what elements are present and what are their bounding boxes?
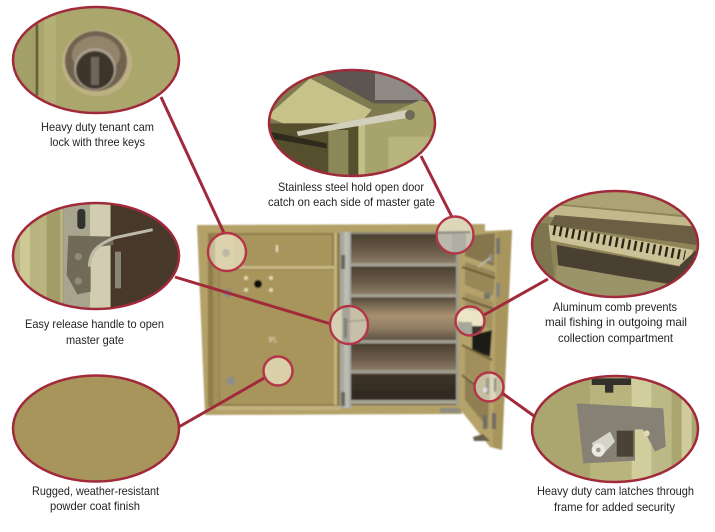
leader: cam lock xyxy=(161,97,224,233)
oval border xyxy=(532,191,698,297)
caption: cam lock xyxy=(41,120,154,149)
magnifier: cam latch on unit xyxy=(474,372,504,402)
lens detail xyxy=(209,239,230,265)
lens detail xyxy=(332,307,366,343)
oval border xyxy=(13,203,179,309)
left door panels: 9'L xyxy=(268,337,278,344)
caption: powder coat: powder coat finish xyxy=(50,499,140,513)
lens detail xyxy=(482,372,496,402)
lens ring xyxy=(330,306,368,344)
oval border xyxy=(532,376,698,482)
magnifier: release handle on unit xyxy=(330,305,370,345)
caption: cam latch xyxy=(537,484,694,514)
photo: latch xyxy=(576,378,692,480)
caption: cam latch: frame for added security xyxy=(554,500,675,514)
lens ring xyxy=(456,306,484,336)
lens ring xyxy=(436,216,474,254)
oval border xyxy=(269,70,435,176)
caption: release handle: Easy release handle to open xyxy=(25,317,164,331)
left door panels xyxy=(208,233,340,410)
photo: comb xyxy=(534,192,696,296)
cabinet frame xyxy=(197,224,485,415)
callout: cam lock xyxy=(10,5,180,115)
leader: door catch xyxy=(421,156,452,217)
magnifier: powder coat on unit xyxy=(264,356,292,386)
caption: cam lock: Heavy duty tenant cam xyxy=(41,120,154,134)
bottom frame label xyxy=(440,408,460,413)
mailbox unit photo xyxy=(197,224,512,450)
lens ring xyxy=(264,356,292,386)
photo: catch xyxy=(270,71,434,175)
caption: door catch xyxy=(268,180,435,209)
magnifier: comb on unit xyxy=(456,306,486,336)
leader: cam latch xyxy=(502,393,534,416)
caption: release handle xyxy=(25,317,164,347)
callout: aluminum comb xyxy=(530,188,703,300)
open master gate xyxy=(459,230,512,450)
master gate post xyxy=(340,232,352,408)
magnifier: cam lock on unit xyxy=(207,232,248,272)
leader: powder coat xyxy=(177,377,266,428)
callout: powder coat swatch xyxy=(13,376,179,482)
caption: aluminum comb: Aluminum comb prevents xyxy=(553,300,677,314)
callout: cam latch xyxy=(530,375,700,483)
lens detail xyxy=(438,218,472,252)
caption: release handle: master gate xyxy=(66,333,124,347)
caption: door catch: Stainless steel hold open door xyxy=(278,180,424,194)
caption: aluminum comb: collection compartment xyxy=(558,331,674,345)
lens detail xyxy=(458,309,483,334)
caption: aluminum comb: mail fishing in outgoing mail xyxy=(545,315,687,329)
lens ring xyxy=(474,372,504,402)
interior compartments and shelves xyxy=(351,232,459,405)
photo: handle xyxy=(14,204,153,308)
magnifier: door catch on unit xyxy=(436,216,476,255)
leader: comb xyxy=(484,279,548,315)
leader: release handle xyxy=(175,277,331,324)
caption: cam latch: Heavy duty cam latches through xyxy=(537,484,694,498)
lens ring xyxy=(208,233,246,271)
caption: cam lock: lock with three keys xyxy=(50,135,145,149)
peephole and rivets xyxy=(224,276,273,386)
callout: door catch xyxy=(267,67,440,180)
caption: powder coat xyxy=(32,484,160,513)
caption: powder coat: Rugged, weather-resistant xyxy=(32,484,160,498)
caption: aluminum comb xyxy=(545,300,687,345)
photo: lock xyxy=(34,16,132,104)
oval border xyxy=(13,7,179,113)
callout: release handle xyxy=(10,202,184,315)
caption: door catch: catch on each side of master gate xyxy=(268,195,435,209)
leader lines xyxy=(161,97,548,428)
